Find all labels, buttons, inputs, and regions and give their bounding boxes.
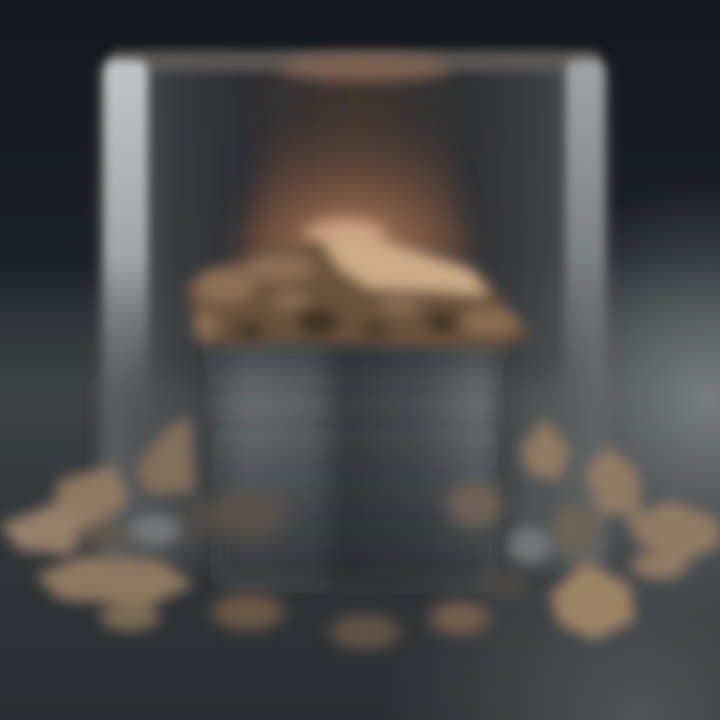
glass cylinder: [102, 50, 606, 570]
grain heap on cup: [185, 232, 532, 348]
heap dark pockets: [234, 308, 458, 338]
scattered grains left: [0, 415, 211, 631]
warm rim highlight: [280, 55, 450, 81]
inner cup: [205, 340, 505, 585]
glass rim: [110, 50, 600, 72]
right wall highlight: [566, 60, 604, 410]
heap left light grains: [193, 254, 518, 339]
warm glow above grains: [235, 85, 470, 265]
bright flare: [305, 219, 385, 251]
lower wall right: [510, 380, 595, 560]
left wall highlight: [104, 60, 148, 420]
scattered grains right: [479, 418, 720, 640]
heap highlight top: [322, 232, 488, 295]
heap base: [185, 240, 532, 348]
scattered grains bottom: [203, 483, 503, 649]
lower wall left: [112, 380, 197, 560]
glass body: [102, 60, 606, 570]
